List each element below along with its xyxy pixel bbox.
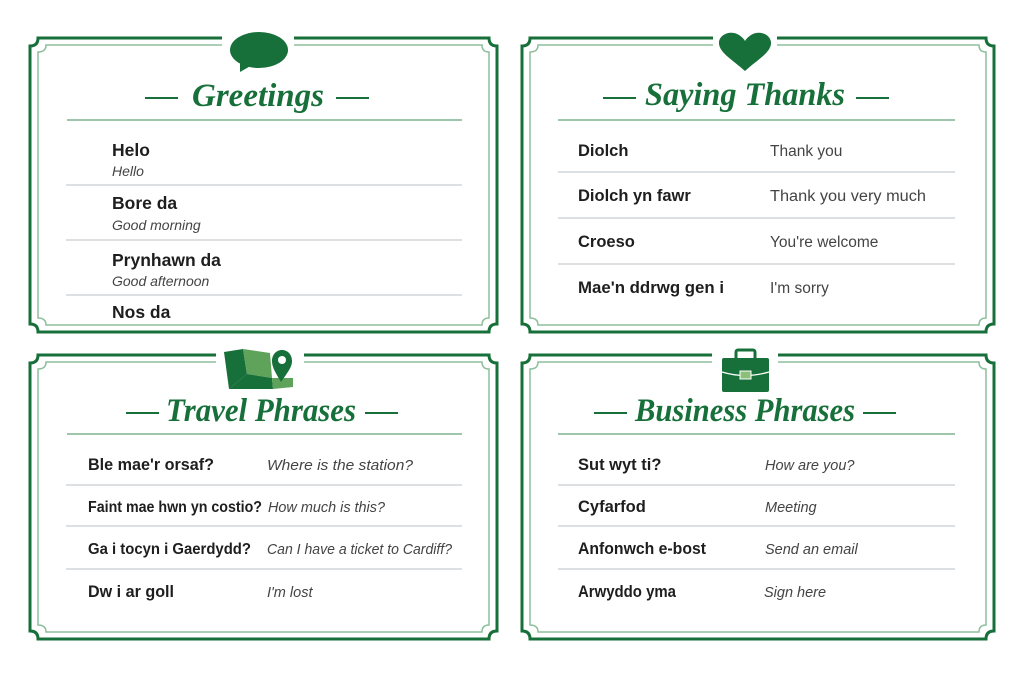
row: Arwyddo yma: Sign here <box>764 585 826 601</box>
row: Helo: Hello <box>112 163 144 179</box>
row: Sut wyt ti? <box>578 456 855 474</box>
row: Croeso: Croeso <box>578 233 635 251</box>
row: Croeso <box>578 233 878 251</box>
row: Nos da: Nos da <box>112 302 171 322</box>
row: Arwyddo yma <box>578 583 826 601</box>
row: Diolch: Thank you <box>770 143 842 160</box>
row: Diolch <box>578 142 842 160</box>
row: Prynhawn da: Good afternoon <box>112 273 210 289</box>
row: Bore da: Good morning <box>112 217 201 233</box>
heading: greetings: Greetings <box>192 78 324 114</box>
heading: saying thanks: Saying Thanks <box>645 77 845 113</box>
icon: map with pin <box>224 349 293 389</box>
panel: business phrases <box>522 350 994 639</box>
icon: heart <box>719 33 771 71</box>
row: Croeso: You're welcome <box>770 234 878 251</box>
row: Mae'n ddrwg gen i: I'm sorry <box>770 280 829 297</box>
row: Ble mae'r orsaf?: Where is the station? <box>267 458 414 474</box>
row: Anfonwch e-bost: Send an email <box>765 542 858 558</box>
row: Dw i ar goll: Dw i ar goll <box>88 583 174 601</box>
row: Faint mae hwn yn costio? <box>88 499 386 516</box>
row: Ga i tocyn i Gaerdydd?: Ga i tocyn i Gaerdydd? <box>88 541 251 558</box>
row: Mae'n ddrwg gen i: Mae'n ddrwg gen i <box>578 279 724 297</box>
row: Arwyddo yma: Arwyddo yma <box>578 583 677 601</box>
row: Ga i tocyn i Gaerdydd?: Can I have a ticket to Cardiff? <box>267 542 453 558</box>
row: Bore da: Bore da <box>112 193 177 213</box>
panel: saying thanks <box>522 33 994 332</box>
icon: briefcase <box>722 350 769 392</box>
row: Faint mae hwn yn costio?: Faint mae hwn yn costio? <box>88 499 262 516</box>
row: Helo <box>112 140 150 179</box>
row: Faint mae hwn yn costio?: How much is this? <box>268 500 386 516</box>
row: Diolch yn fawr: Thank you very much <box>770 188 926 205</box>
row: Dw i ar goll <box>88 583 313 601</box>
row: Helo: Helo <box>112 140 150 160</box>
row: Dw i ar goll: I'm lost <box>267 585 313 601</box>
row: Diolch yn fawr <box>578 187 926 205</box>
row: Prynhawn da <box>112 250 221 289</box>
row: Sut wyt ti?: Sut wyt ti? <box>578 456 661 474</box>
heading: travel phrases: Travel Phrases <box>166 393 356 429</box>
panel: greetings <box>30 32 497 332</box>
row: Sut wyt ti?: How are you? <box>765 458 855 474</box>
row: Ble mae'r orsaf?: Ble mae'r orsaf? <box>88 456 214 474</box>
row: Bore da <box>112 193 201 233</box>
heading: business phrases: Business Phrases <box>634 393 855 429</box>
row: Cyfarfod <box>578 498 817 516</box>
row: Anfonwch e-bost: Anfonwch e-bost <box>578 540 706 558</box>
row: Ga i tocyn i Gaerdydd? <box>88 541 453 558</box>
row: Prynhawn da: Prynhawn da <box>112 250 221 270</box>
row: Ble mae'r orsaf? <box>88 456 414 474</box>
row: Diolch: Diolch <box>578 142 628 160</box>
icon: speech bubble <box>230 32 288 72</box>
row: Cyfarfod: Cyfarfod <box>578 498 646 516</box>
row: Anfonwch e-bost <box>578 540 858 558</box>
row: Cyfarfod: Meeting <box>765 500 817 516</box>
row: Mae'n ddrwg gen i <box>578 279 829 297</box>
panel: travel phrases <box>30 349 497 639</box>
row: Diolch yn fawr: Diolch yn fawr <box>578 187 691 205</box>
